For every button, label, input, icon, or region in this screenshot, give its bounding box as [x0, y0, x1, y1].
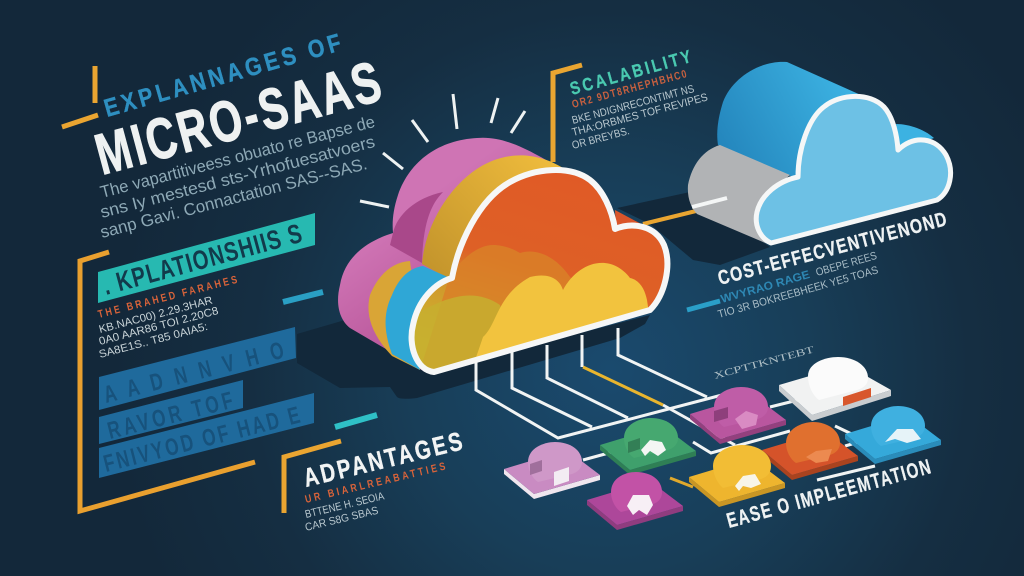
blue bar 1: A A D N N V H O [101, 337, 287, 409]
body text: 0A0 AAR86 TOI 2.20C8 [98, 305, 220, 348]
sun rays [360, 94, 525, 207]
tile: yellow [689, 445, 785, 507]
scalability bracket [553, 65, 582, 162]
network lines [476, 328, 875, 480]
tile: orange [762, 422, 858, 480]
orange connector to blue cloud [643, 211, 696, 224]
title line 1: EXPLANNAGES OF [101, 28, 344, 122]
tile: lilac [504, 442, 600, 499]
panel bracket [80, 252, 255, 511]
panel: scalability [553, 47, 709, 162]
body text: KB.NAC00) 2.29.3HAR [98, 295, 214, 336]
icon: orange badge [806, 449, 832, 463]
front face [412, 170, 667, 372]
intro paragraph: sns Iy mestesd sts-Yrhofuesatvoers [98, 132, 377, 222]
cost subheading: WVYRAO RAGE [720, 269, 812, 306]
tile: magenta [587, 472, 683, 530]
panel: cost effectiveness [687, 208, 949, 321]
blue stripe [386, 266, 450, 370]
tile: blue [845, 406, 941, 464]
accent dash blue [283, 292, 323, 302]
blue cloud front [756, 96, 951, 243]
inner cloud shapes [405, 245, 650, 375]
intro paragraph [98, 112, 377, 242]
scalability body text [571, 83, 709, 152]
cost body text: TIO 3R BOKREEBHEEK YE5 TOAS [717, 264, 880, 321]
scalability body text: OR BREYBS. [571, 125, 631, 152]
advantages subheading: UR BIARLREABATTIES [304, 461, 447, 506]
panel: advantages [284, 426, 465, 534]
blue cloud side: upper [717, 62, 872, 180]
cost accent dash [687, 301, 720, 310]
tile: white router [779, 357, 891, 421]
inner orange hill [442, 245, 571, 306]
blue cloud [688, 62, 951, 245]
main cloud [338, 138, 667, 375]
blue bar 3: FNIVYOD OF HAD E [101, 402, 303, 478]
yellow side [422, 155, 580, 285]
scalability body text: THA:ORBMES TOF REVIPES [571, 92, 709, 139]
tile: purple [690, 387, 786, 444]
blue cloud side: right sliver [896, 124, 934, 150]
advantages heading: ADPANTAGES [301, 426, 465, 492]
body text: SA8E1S.. T85 0AIA5: [98, 321, 209, 361]
icon: magenta badge [627, 495, 653, 515]
body text [98, 295, 220, 361]
cast shadows [297, 192, 770, 399]
cost body text: OBEPE REES [815, 250, 878, 279]
blue bar 2: RAVOR TOF [105, 387, 236, 445]
blue cloud side: grey [688, 145, 790, 245]
cost heading: COST-EFFECVENTIVENOND [715, 208, 949, 289]
accent dash teal [335, 415, 377, 427]
inner yellow cloud [476, 262, 648, 357]
icon: orange status badge [843, 388, 871, 406]
icon: window [554, 467, 569, 486]
advantages body text [304, 490, 386, 534]
scalability heading: SCALABILITY [568, 47, 693, 99]
title accent bracket [62, 66, 98, 127]
purple side [338, 138, 565, 372]
icon: blue badge [885, 429, 921, 443]
white dash on grey side [692, 198, 727, 207]
icon: yellow badge [735, 474, 761, 491]
panel: relationships [80, 213, 315, 511]
tile: green [600, 418, 696, 475]
scalability body text: BKE NDIGNRECONTIMT NS [571, 83, 696, 127]
heading banner: . KPLATIONSHIIS S [100, 218, 305, 302]
small label above tiles: XCPTTKNTEBT [713, 345, 815, 382]
advantages body text: BTTENE H. SEOIA [304, 490, 386, 521]
advantages body text: CAR S8G SBAS [304, 505, 380, 534]
advantages bracket [284, 441, 341, 513]
rear orange wedge [615, 210, 645, 232]
purple shade [390, 192, 443, 263]
white outline [412, 170, 667, 372]
yellow stub line [670, 478, 693, 487]
title block [62, 28, 388, 187]
heading: ease of implementation: EASE O IMPLEEMTATION [724, 454, 933, 532]
intro paragraph: The vapartitiveess obuato re Bapse de [98, 112, 377, 202]
intro paragraph: sanp Gavi. Connactation SAS--SAS. [98, 154, 369, 242]
inner olive hill [414, 296, 500, 369]
icon: green badge [641, 440, 666, 456]
icon: purple badge [735, 411, 758, 429]
subheading: THE BRAHED FARAHES [97, 274, 239, 321]
scalability subheading: OR2 9DT8RHEPHBHC0 [571, 68, 689, 111]
title line 2: MICRO-SAAS [88, 48, 388, 187]
small yellow stripe [368, 261, 420, 370]
